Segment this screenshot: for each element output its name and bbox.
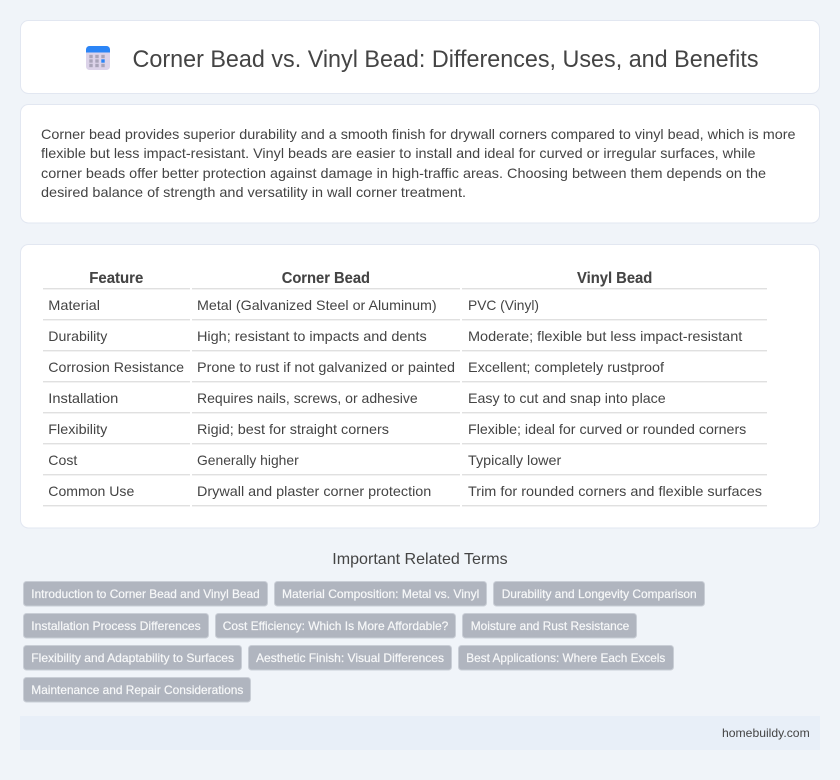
tag — [24, 582, 268, 606]
row: corrosion resistance — [48, 359, 664, 375]
row: installation: Easy to cut and snap into place — [468, 390, 666, 406]
tag: Aesthetic Finish: Visual Differences — [256, 651, 444, 665]
tag — [24, 678, 250, 702]
tag: Moisture and Rust Resistance — [471, 619, 630, 633]
table header: Corner Bead — [282, 270, 370, 287]
related term tags — [24, 582, 704, 702]
row: corrosion resistance: Excellent; completely rustproof — [468, 359, 664, 375]
tag: Durability and Longevity Comparison — [502, 587, 697, 601]
footer — [20, 716, 820, 750]
row: cost: Cost — [48, 452, 77, 468]
title: Corner Bead vs. Vinyl Bead: Differences, Uses, and Benefits — [132, 46, 758, 73]
row: material: Metal (Galvanized Steel or Aluminum) — [197, 297, 437, 313]
row: corrosion resistance: Prone to rust if not galvanized or painted — [197, 359, 455, 375]
row: cost — [48, 452, 562, 468]
tag: Flexibility and Adaptability to Surfaces — [31, 651, 234, 665]
row: installation — [48, 390, 666, 406]
panel: header — [20, 20, 820, 94]
tag — [458, 646, 674, 670]
row: cost: Typically lower — [468, 452, 562, 468]
table header — [89, 270, 652, 287]
row: durability: High; resistant to impacts and dents — [197, 328, 427, 344]
tag: Cost Efficiency: Which Is More Affordable? — [223, 619, 449, 633]
row: common use: Drywall and plaster corner protection — [197, 483, 431, 499]
row: installation: Installation — [48, 390, 118, 406]
row: durability: Moderate; flexible but less impact-resistant — [468, 328, 742, 344]
panel: comparison table — [20, 244, 820, 528]
intro text: flexible but less impact-resistant. Vinyl beads are easier to install and ideal for curved or irregular surfaces, while — [41, 145, 756, 161]
footer source: homebuildy.com — [722, 726, 810, 740]
row: flexibility: Flexibility — [48, 421, 107, 437]
tag: Material Composition: Metal vs. Vinyl — [282, 587, 479, 601]
tag — [248, 646, 452, 670]
row: flexibility: Flexible; ideal for curved or rounded corners — [468, 421, 746, 437]
table header: Feature — [89, 270, 143, 287]
panel: introduction — [20, 104, 820, 223]
tag — [24, 646, 242, 670]
row: cost: Generally higher — [197, 452, 299, 468]
tag: Installation Process Differences — [31, 619, 201, 633]
tag: Best Applications: Where Each Excels — [466, 651, 665, 665]
tag: Introduction to Corner Bead and Vinyl Bead — [31, 587, 260, 601]
tag — [494, 582, 704, 606]
row: durability — [48, 328, 742, 344]
row: flexibility: Rigid; best for straight corners — [197, 421, 389, 437]
table header: Vinyl Bead — [577, 270, 652, 287]
row: installation: Requires nails, screws, or adhesive — [197, 390, 418, 406]
tag — [216, 614, 456, 638]
tag — [462, 614, 636, 638]
row: flexibility — [48, 421, 746, 437]
icon: calendar — [86, 46, 110, 70]
intro text: Corner bead provides superior durability and a smooth finish for drywall corners compared to vinyl bead, which is more — [41, 126, 796, 142]
row: common use — [48, 483, 762, 499]
row: common use: Trim for rounded corners and flexible surfaces — [468, 483, 762, 499]
row: material — [48, 297, 539, 313]
row: material: Material — [48, 297, 100, 313]
row: durability: Durability — [48, 328, 107, 344]
heading: important related terms: Important Related Terms — [332, 551, 508, 568]
row: common use: Common Use — [48, 483, 135, 499]
intro text: corner beads offer better protection against damage in high-traffic areas. Choosing between them depends on the — [41, 165, 766, 181]
row: material: PVC (Vinyl) — [468, 297, 539, 313]
row: corrosion resistance: Corrosion Resistance — [48, 359, 184, 375]
tag: Maintenance and Repair Considerations — [31, 683, 243, 697]
intro text: desired balance of strength and versatility in wall corner treatment. — [41, 184, 466, 200]
tag — [24, 614, 208, 638]
intro text — [41, 126, 796, 200]
tag — [274, 582, 486, 606]
